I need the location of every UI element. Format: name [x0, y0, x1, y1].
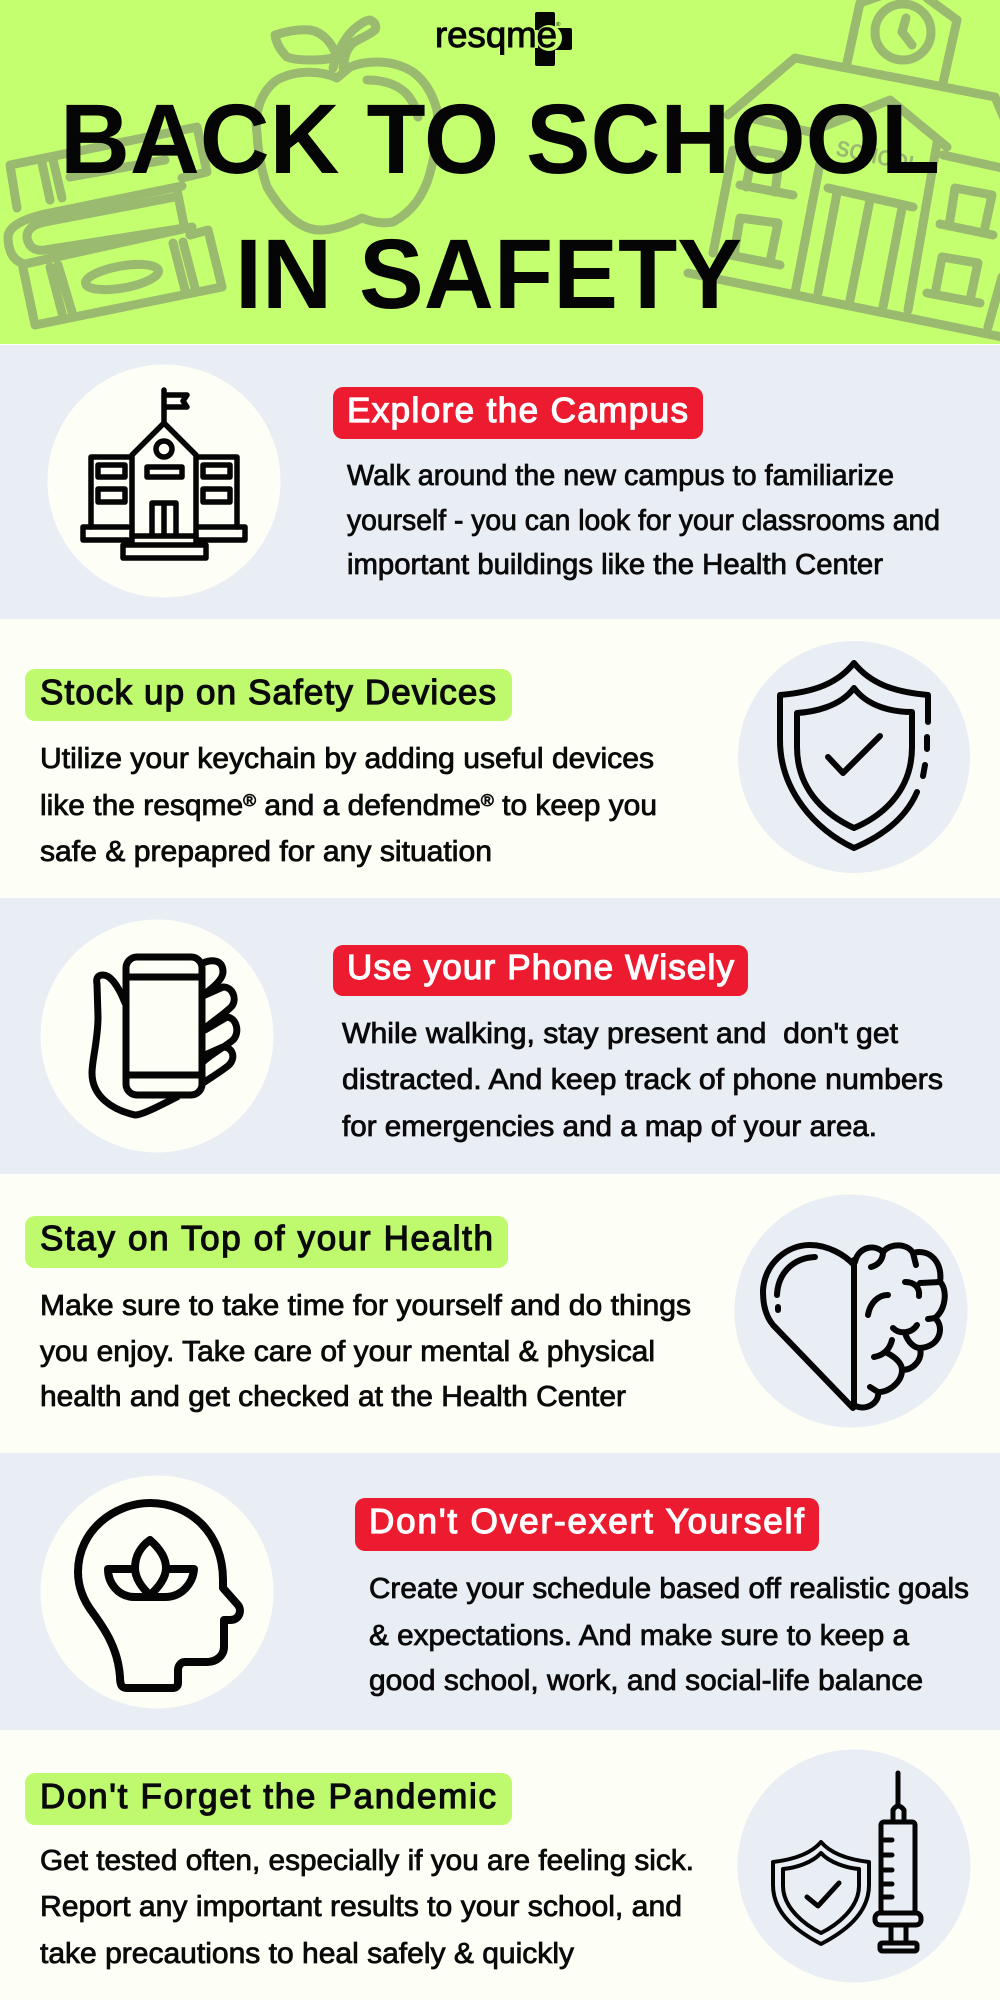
watermark icon: school building: SCHOOL — [834, 135, 922, 178]
text: explore the campus body — [347, 460, 940, 581]
text: health body — [40, 1290, 691, 1413]
title — [60, 83, 940, 329]
text: over-exert body: good school, work, and social-life balance — [369, 1665, 923, 1697]
panel: use your phone wisely — [0, 898, 1000, 1174]
logo: resqme — [435, 12, 572, 66]
title: BACK TO SCHOOL — [60, 83, 940, 194]
title: IN SAFETY — [235, 218, 742, 329]
text: explore the campus body: important buildings like the Health Center — [347, 549, 883, 581]
icon: heart and brain — [734, 1194, 968, 1428]
text: safety devices body: Utilize your keychain by adding useful devices — [40, 743, 654, 775]
panel: explore the campus — [0, 345, 1000, 619]
text: explore the campus body: yourself - you can look for your classrooms and — [347, 505, 940, 537]
watermark icon: apple — [256, 20, 438, 230]
watermark icon: books — [8, 127, 222, 325]
text: safety devices body: to keep you — [494, 790, 657, 822]
heading: don't forget the pandemic: Don't Forget the Pandemic — [40, 1777, 496, 1816]
text: over-exert body — [369, 1573, 969, 1697]
icon: hand holding phone — [40, 920, 274, 1152]
panel: don't forget the pandemic — [0, 1730, 1000, 2000]
text: pandemic body — [40, 1845, 694, 1970]
text: safety devices body: ® — [243, 791, 257, 810]
text: pandemic body: Report any important results to your school, and — [40, 1891, 682, 1923]
heading: don't over-exert yourself: Don't Over-exert Yourself — [369, 1502, 804, 1541]
panel: stay on top of your health — [0, 1174, 1000, 1453]
text: over-exert body: Create your schedule based off realistic goals — [369, 1573, 969, 1605]
logo: resqme: ® — [556, 21, 561, 28]
text: safety devices body: safe & prepapred for any situation — [40, 836, 492, 868]
icon: shield with check — [738, 641, 970, 873]
text: phone body: for emergencies and a map of your area. — [342, 1111, 877, 1143]
text: phone body — [342, 1018, 943, 1143]
text: safety devices body — [40, 743, 657, 868]
text: health body: Make sure to take time for yourself and do things — [40, 1290, 691, 1322]
panel: don't over-exert yourself — [0, 1453, 1000, 1730]
heading: don't over-exert yourself — [355, 1498, 819, 1551]
heading: stock up on safety devices: Stock up on Safety Devices — [40, 673, 496, 712]
panel: stock up on safety devices — [0, 619, 1000, 898]
logo: resqme: resqme — [435, 14, 557, 55]
watermark icon: school building — [688, 0, 1000, 337]
text: phone body: distracted. And keep track of phone numbers — [342, 1064, 943, 1096]
icon: shield and syringe — [738, 1750, 970, 1982]
heading: explore the campus: Explore the Campus — [347, 391, 688, 430]
text: safety devices body: ® — [481, 791, 494, 810]
text: pandemic body: take precautions to heal safely & quickly — [40, 1938, 575, 1970]
heading: use your phone wisely: Use your Phone Wisely — [347, 948, 734, 987]
heading: stay on top of your health: Stay on Top of your Health — [40, 1219, 493, 1258]
text: phone body: While walking, stay present and don't get — [342, 1018, 898, 1050]
icon: campus building — [48, 364, 280, 598]
heading: explore the campus — [333, 387, 703, 439]
text: safety devices body: and a defendme — [256, 790, 481, 822]
text: health body: you enjoy. Take care of your mental & physical — [40, 1336, 655, 1368]
text: explore the campus body: Walk around the new campus to familiarize — [347, 460, 894, 492]
icon: head with lotus — [40, 1476, 274, 1708]
text: health body: health and get checked at the Health Center — [40, 1381, 626, 1413]
text: pandemic body: Get tested often, especially if you are feeling sick. — [40, 1845, 694, 1877]
panel: header — [0, 0, 1000, 344]
text: over-exert body: & expectations. And make sure to keep a — [369, 1620, 910, 1652]
text: safety devices body: like the resqme — [40, 790, 237, 822]
